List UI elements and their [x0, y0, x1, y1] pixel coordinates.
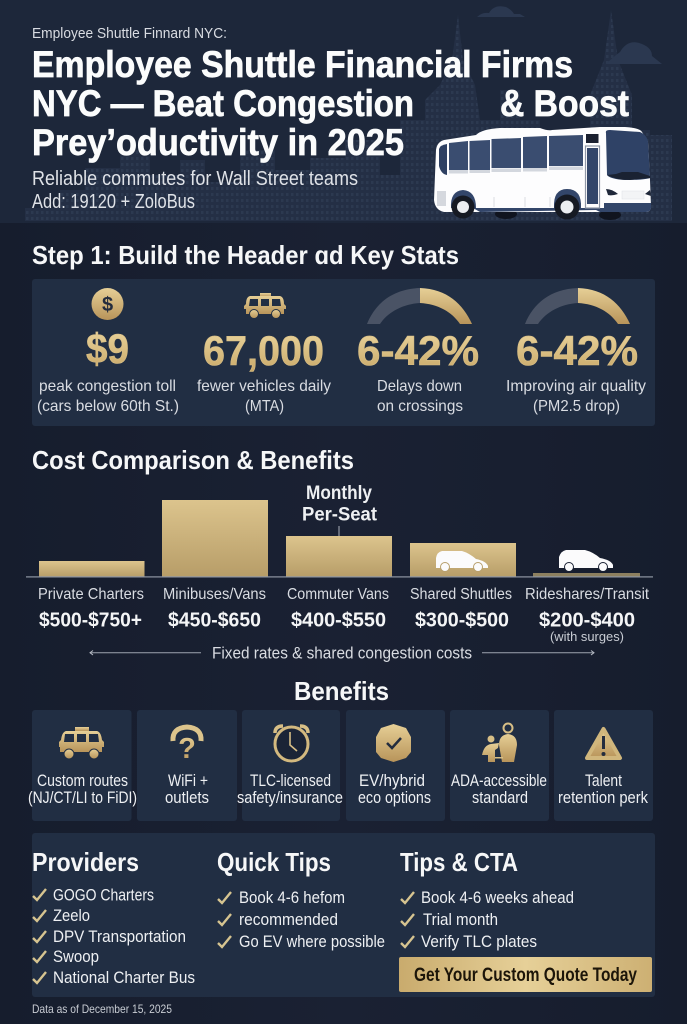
stat: fewer vehicles: 67,000	[203, 327, 324, 374]
column: providers: National Charter Bus	[53, 968, 195, 987]
stat: fewer vehicles	[197, 293, 331, 415]
title: Employee Shuttle Financial Firms	[32, 44, 573, 85]
bar prices: $450-$650	[168, 610, 261, 632]
button: custom quote	[399, 957, 652, 992]
card: wifi	[137, 710, 237, 821]
icon: bus	[59, 727, 104, 759]
bar labels	[38, 586, 650, 603]
heading: step 1: Step 1: Build the Header ɑd Key Stats	[32, 240, 459, 270]
stat: delays down: 6-42%	[357, 327, 479, 374]
bar prices: $500-$750+	[39, 610, 142, 632]
icon: van	[244, 293, 286, 318]
icon: dollar coin	[92, 288, 124, 320]
card: TLC licensed	[237, 710, 343, 821]
bar labels: Shared Shuttles	[410, 586, 512, 603]
card: talent retention	[554, 710, 653, 821]
bar prices: $200-$400	[539, 610, 635, 632]
column: tips and CTA	[399, 847, 652, 992]
subtitle: Add: 19120 + ZoloBus	[32, 191, 195, 213]
stat: air quality: 6-42%	[516, 327, 638, 374]
bar labels: Commuter Vans	[287, 586, 389, 603]
arrow note: fixed rates	[90, 644, 594, 662]
card: EV hybrid	[346, 710, 445, 821]
bar prices: (with surges)	[550, 629, 624, 644]
bar prices: $400-$550	[291, 610, 386, 632]
card: custom routes: Custom routes	[37, 771, 128, 790]
card: ADA accessible	[450, 710, 549, 821]
card: ADA accessible: standard	[472, 788, 528, 807]
title	[32, 44, 629, 163]
column: tips and CTA: Trial month	[423, 910, 498, 929]
footnote: Data as of December 15, 2025	[32, 1002, 172, 1016]
stat: delays down: on crossings	[377, 398, 463, 415]
column: quick tips: Book 4-6 hefom	[239, 888, 345, 907]
bar: private charters	[39, 561, 144, 577]
icon: car on rideshares bar	[559, 550, 613, 572]
card: custom routes: (NJ/CT/LI to FiDI)	[28, 788, 137, 807]
bar: minibuses	[162, 500, 268, 577]
stat: congestion toll: $9	[86, 325, 129, 372]
header kicker: Employee Shuttle Finnard NYC:	[32, 25, 227, 42]
chart label: Monthly	[306, 483, 372, 504]
column: quick tips	[217, 847, 385, 951]
bar prices: $300-$500	[415, 610, 509, 632]
button: custom quote: Get Your Custom Quote Today	[414, 965, 637, 986]
chart label: Per-Seat	[302, 504, 378, 526]
skyline background	[25, 6, 672, 221]
arrow note: fixed rates: Fixed rates & shared congestion costs	[212, 644, 472, 662]
panel: key stats	[32, 279, 655, 426]
panel: providers, tips and call to action	[32, 833, 655, 997]
card: custom routes	[28, 710, 137, 821]
column: tips and CTA: Verify TLC plates	[421, 932, 537, 951]
stat: delays down	[357, 288, 479, 415]
chart: gauge	[525, 288, 630, 324]
stat: delays down: Delays down	[377, 378, 462, 395]
bus wheels	[451, 189, 581, 220]
column: providers: Zeelo	[53, 906, 90, 925]
card: talent retention: retention perk	[558, 788, 648, 807]
title: NYC — Beat Congestion	[32, 83, 414, 124]
icon: people	[482, 724, 517, 762]
title: Prey’oductivity in 2025	[32, 122, 404, 163]
panel: benefits cards	[28, 710, 653, 821]
illustration: white shuttle bus	[434, 127, 651, 220]
subtitle	[32, 168, 358, 213]
column: providers	[32, 847, 195, 987]
bar chart: monthly per-seat cost	[26, 483, 653, 578]
bar: commuter vans	[286, 536, 392, 577]
icon: check badge	[376, 724, 411, 762]
card: ADA accessible: ADA-accessible	[451, 771, 547, 790]
stat: fewer vehicles: fewer vehicles daily	[197, 378, 331, 395]
stat: congestion toll: (cars below 60th St.)	[37, 398, 179, 415]
column: providers: GOGO Charters	[53, 886, 154, 904]
icon: wifi question: ?	[178, 733, 196, 765]
stat: congestion toll	[37, 288, 179, 415]
card: EV hybrid: EV/hybrid	[359, 771, 425, 790]
bar: shared shuttles	[410, 543, 516, 577]
stat: air quality: Improving air quality	[506, 378, 646, 395]
column: quick tips: Quick Tips	[217, 847, 331, 877]
icon: alarm clock	[275, 726, 308, 761]
column: tips and CTA: Book 4-6 weeks ahead	[421, 888, 574, 907]
column: quick tips: recommended	[239, 910, 338, 929]
title: & Boost	[500, 83, 629, 124]
card: wifi: outlets	[165, 788, 209, 807]
heading: cost comparison: Cost Comparison & Benefits	[32, 445, 354, 475]
header banner	[0, 0, 687, 223]
subtitle: Reliable commutes for Wall Street teams	[32, 168, 358, 190]
bar labels: Private Charters	[38, 586, 144, 603]
bar labels: Minibuses/Vans	[163, 586, 266, 603]
column: providers: Providers	[32, 847, 139, 877]
card: wifi: WiFi +	[168, 771, 208, 790]
card: TLC licensed: TLC-licensed	[250, 771, 331, 790]
stat: air quality: (PM2.5 drop)	[533, 398, 620, 415]
column: providers: Swoop	[53, 947, 99, 966]
icon: car on shared shuttles bar	[436, 551, 488, 572]
column: tips and CTA: Tips & CTA	[400, 847, 518, 877]
stat: fewer vehicles: (MTA)	[245, 398, 284, 415]
heading: benefits: Benefits	[294, 676, 389, 706]
icon: dollar coin: $	[102, 294, 113, 316]
bar labels: Rideshares/Transit	[525, 586, 650, 603]
card: EV hybrid: eco options	[358, 788, 431, 807]
column: quick tips: Go EV where possible	[239, 932, 385, 951]
bar prices	[39, 610, 635, 644]
stat: congestion toll: peak congestion toll	[39, 378, 176, 395]
bar: rideshares	[533, 573, 640, 577]
stat: air quality	[506, 288, 646, 415]
card: TLC licensed: safety/insurance	[237, 788, 343, 807]
icon: warning triangle	[587, 729, 620, 758]
column: providers: DPV Transportation	[53, 927, 186, 946]
chart: gauge	[367, 288, 472, 324]
card: talent retention: Talent	[585, 771, 622, 790]
chart label	[302, 483, 378, 536]
